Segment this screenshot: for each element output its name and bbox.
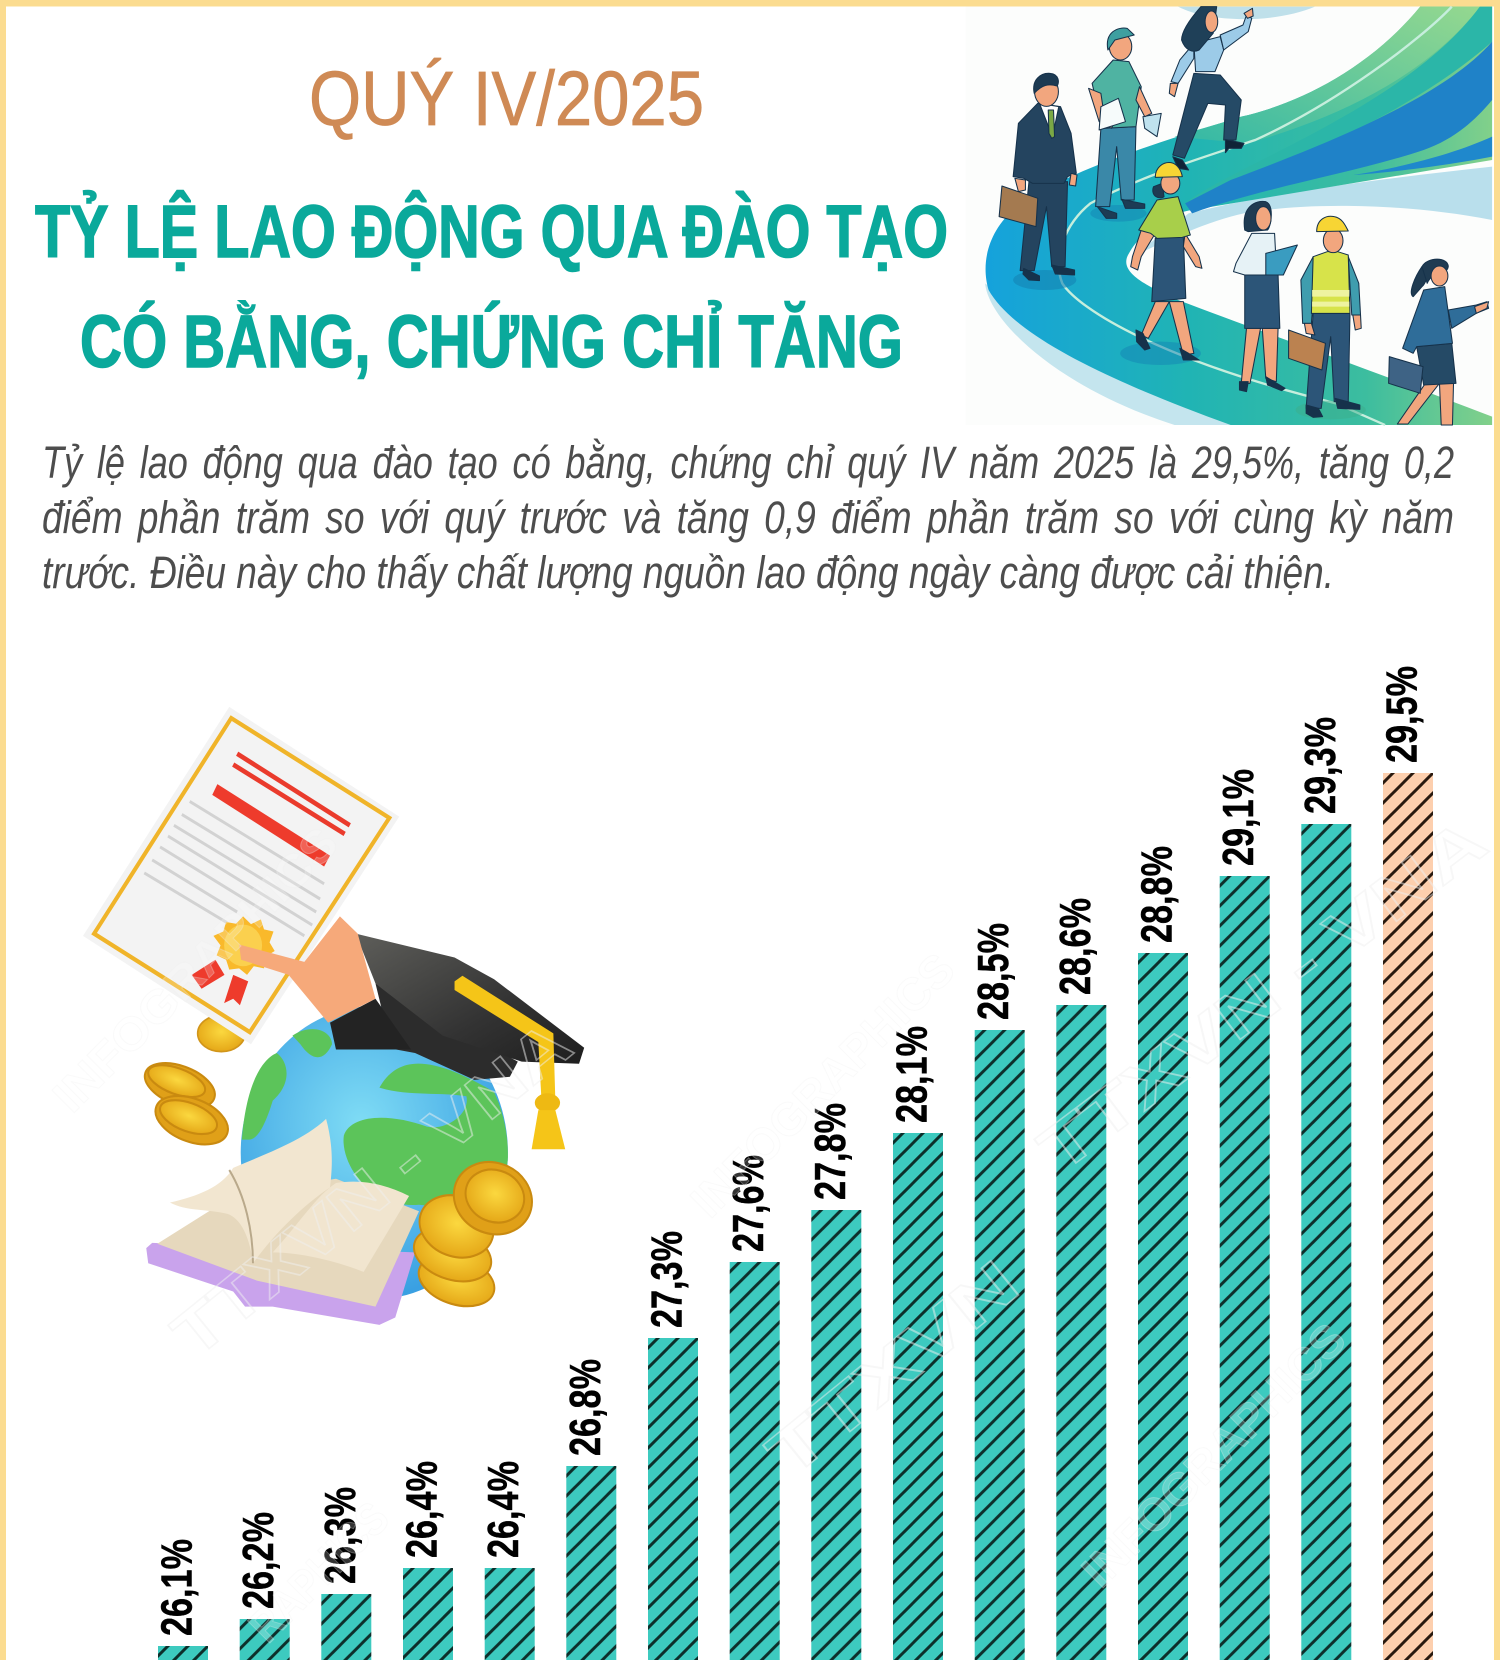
- illustration: workers walking on a career path: [966, 7, 1492, 425]
- watermark: INFOGRAPHICS: [42, 817, 348, 1122]
- bar: 26,4%: 26,4%: [398, 1461, 446, 1558]
- bar: 26,2%: 26,2%: [234, 1512, 283, 1609]
- bar chart: trained labour rate by quarter: [152, 666, 1433, 1660]
- bar: 28,6%: [1051, 898, 1106, 1660]
- icon: coin stack right: [408, 1153, 539, 1315]
- main title: [35, 190, 948, 383]
- bar: 27,6%: 27,6%: [724, 1155, 773, 1252]
- bar: 26,4% second: [479, 1461, 535, 1660]
- figure: businesswoman in blue suit with briefcase: [1389, 259, 1489, 425]
- bar: 26,8%: [561, 1359, 616, 1660]
- figure: woman in yellow hard hat and green blouse: [1120, 163, 1202, 365]
- icon: hand holding diploma: [239, 916, 411, 1049]
- bar: 28,6%: 28,6%: [1051, 898, 1100, 995]
- watermark: TTXVN: [753, 1246, 1032, 1491]
- year heading: QUÝ IV/2025: [309, 56, 704, 142]
- icon: globe: [241, 1006, 508, 1299]
- bar: 27,8%: [806, 1103, 861, 1660]
- bar: 26,4%: [398, 1461, 453, 1660]
- watermark: INFOGRAPHICS: [680, 943, 965, 1227]
- icon: open book: [146, 1119, 419, 1325]
- bar: 28,1%: 28,1%: [888, 1026, 936, 1123]
- figure: woman climbing: [1169, 7, 1253, 170]
- bar: 26,8%: 26,8%: [561, 1359, 610, 1456]
- bar: 26,4% second: 26,4%: [479, 1461, 528, 1558]
- main title: TỶ LỆ LAO ĐỘNG QUA ĐÀO TẠO: [35, 190, 948, 273]
- icon: diploma: [83, 707, 399, 1044]
- bar: 28,8%: 28,8%: [1132, 846, 1182, 943]
- watermark: TTXVN - VNA: [1025, 804, 1500, 1186]
- figure: man in safety vest with briefcase: [1289, 216, 1366, 419]
- bar: 27,3%: 27,3%: [642, 1231, 692, 1328]
- bar: 28,8%: [1132, 846, 1188, 1660]
- main title: CÓ BẰNG, CHỨNG CHỈ TĂNG: [80, 300, 903, 383]
- bar: 29,1%: 29,1%: [1214, 769, 1263, 866]
- bar: 29,3%: 29,3%: [1296, 717, 1345, 814]
- icon: coins left: [140, 1055, 234, 1154]
- bar: 28,5%: 28,5%: [969, 923, 1018, 1020]
- figure: woman with clipboard: [1234, 201, 1297, 392]
- figure: worker in teal shirt with papers: [1089, 28, 1161, 222]
- watermark: [42, 804, 1500, 1652]
- bar: 29,5% highlighted: [1378, 666, 1433, 1660]
- bar: 29,5% highlighted: 29,5%: [1378, 666, 1426, 763]
- illustration: diploma, graduation cap, globe, book and coins: [83, 707, 584, 1325]
- icon: graduation cap: [356, 934, 584, 1149]
- bar: 29,1%: [1214, 769, 1270, 1660]
- watermark: TTXVN - VNA: [158, 1007, 585, 1371]
- watermark: INFOGRAPHICS: [1071, 1313, 1356, 1597]
- bar: 26,1%: 26,1%: [152, 1539, 202, 1636]
- bar: 28,1%: [888, 1026, 943, 1660]
- bar: 27,3%: [642, 1231, 698, 1660]
- bar: 26,3%: 26,3%: [316, 1487, 365, 1584]
- intro paragraph: [42, 437, 1454, 598]
- bar: 26,1%: [152, 1539, 208, 1660]
- bar: 27,6%: [724, 1155, 780, 1660]
- figure: businessman with briefcase: [999, 73, 1077, 290]
- watermark: RAPHICS: [238, 1492, 399, 1652]
- bar: 29,3%: [1296, 717, 1351, 1660]
- icon: coin behind diploma: [198, 1015, 245, 1052]
- bar: 27,8%: 27,8%: [806, 1103, 855, 1200]
- bar: 28,5%: [969, 923, 1025, 1660]
- bar: 26,3%: [316, 1487, 371, 1660]
- bar: 26,2%: [234, 1512, 290, 1660]
